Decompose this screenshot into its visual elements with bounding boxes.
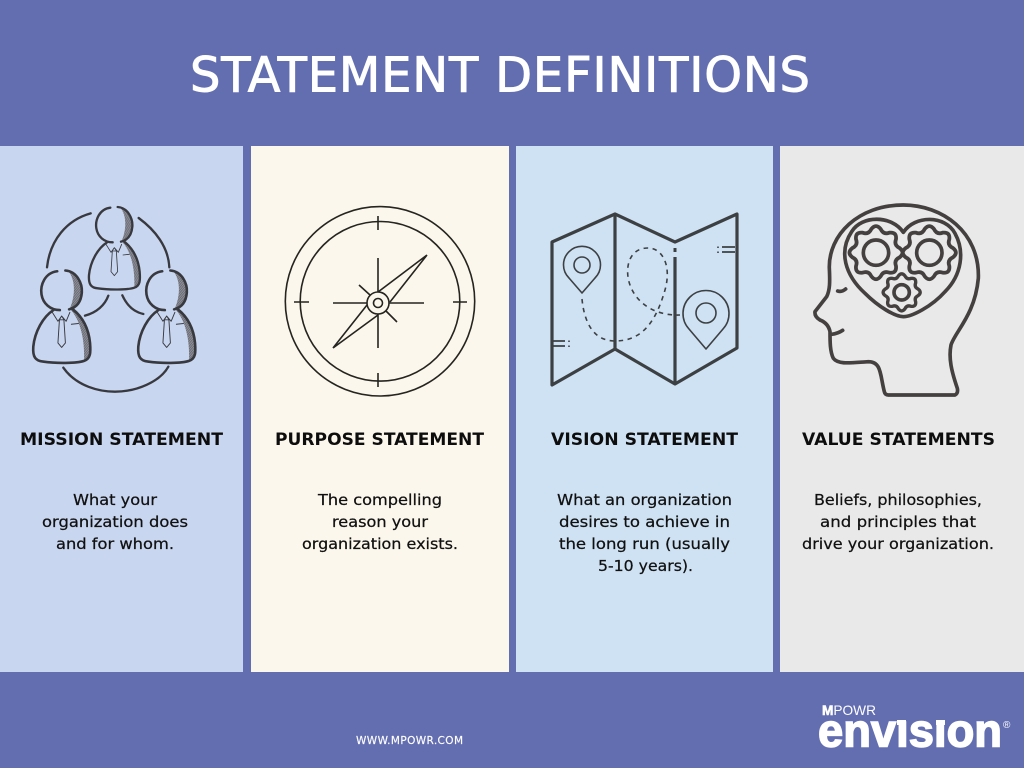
text: purpose definition: reason your: [332, 513, 429, 531]
text: value definition: Beliefs, philosophies,: [814, 491, 982, 509]
heading: purpose statement: PURPOSE STATEMENT: [275, 430, 484, 450]
text: purpose definition: organization exists.: [302, 535, 458, 553]
heading: value statements: VALUE STATEMENTS: [802, 430, 995, 450]
icon: head with heart and gears: [815, 205, 978, 395]
text: vision definition: desires to achieve in: [559, 513, 730, 531]
text: mission definition: What your: [73, 491, 158, 509]
title: STATEMENT DEFINITIONS: [190, 48, 810, 104]
website url: WWW.MPOWR.COM: [356, 735, 463, 747]
text: value definition: [802, 491, 994, 553]
text: vision definition: [557, 491, 732, 575]
heading: vision statement: VISION STATEMENT: [551, 430, 738, 450]
icon: folded map with pins: [552, 214, 737, 385]
logo: MPOWR envision: ®: [1003, 720, 1011, 731]
icon: compass: [285, 207, 475, 396]
panel: value statements: [780, 146, 1024, 672]
heading: mission statement: MISSION STATEMENT: [20, 430, 223, 450]
text: value definition: and principles that: [820, 513, 976, 531]
text: purpose definition: [302, 491, 458, 553]
text: mission definition: organization does: [42, 513, 188, 531]
text: vision definition: the long run (usually: [559, 535, 730, 553]
logo: MPOWR envision: MPOWR: [822, 702, 876, 718]
text: mission definition: [42, 491, 188, 553]
panel: mission statement: [0, 146, 243, 672]
text: vision definition: 5-10 years).: [598, 557, 693, 575]
icon: three people in a circle: [33, 207, 195, 392]
text: value definition: drive your organization.: [802, 535, 994, 553]
text: mission definition: and for whom.: [56, 535, 174, 553]
panel: purpose statement: [251, 146, 509, 672]
logo: MPOWR envision: envision: [818, 704, 1002, 756]
panel: vision statement: [516, 146, 773, 672]
text: purpose definition: The compelling: [317, 491, 442, 509]
text: vision definition: What an organization: [557, 491, 732, 509]
